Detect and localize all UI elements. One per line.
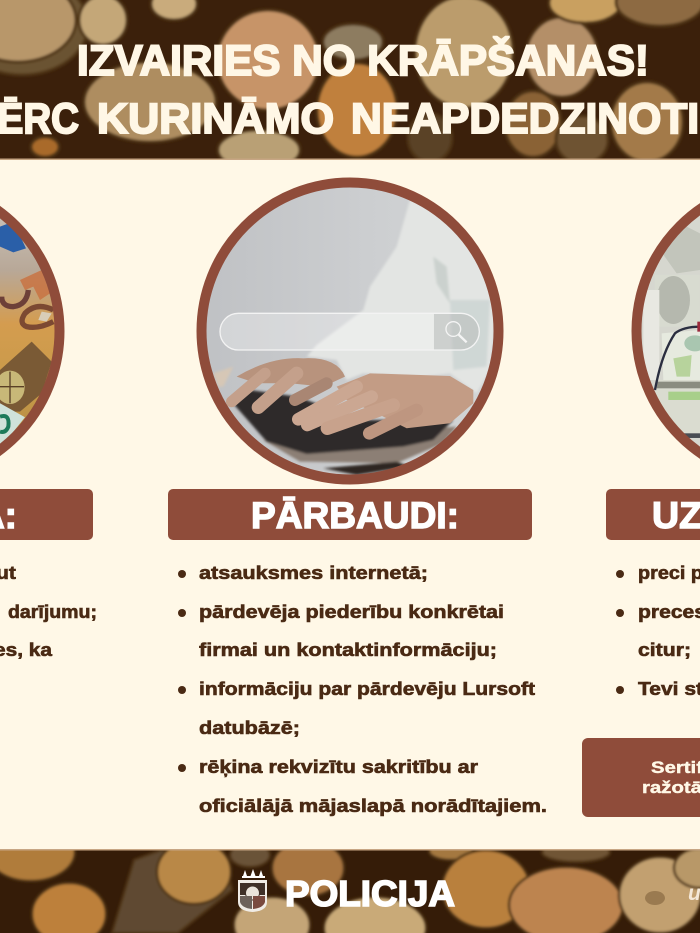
middle column heading — [168, 489, 532, 540]
title — [0, 36, 700, 143]
shirt — [307, 200, 497, 393]
right column list: citur; — [638, 640, 691, 660]
middle column list: oficiālājā mājaslapā norādītajiem. — [199, 796, 547, 816]
logo: police coat of arms — [238, 869, 267, 912]
middle column list: firmai un kontaktinformāciju; — [199, 640, 497, 660]
icon: shield — [238, 880, 267, 912]
icon: three stars — [242, 869, 265, 878]
left column list: darījumu; — [8, 602, 97, 622]
left column list — [0, 563, 97, 660]
icon: EU flag — [0, 222, 26, 252]
right column heading: UZ — [652, 495, 700, 536]
keyboard — [230, 390, 453, 454]
callout: certificate — [582, 738, 700, 817]
right photo: dollar banknotes and glasses — [632, 203, 700, 459]
middle column list: informāciju par pārdevēju Lursoft — [199, 679, 535, 699]
middle photo: typing on a laptop with a search bar — [200, 180, 500, 480]
glasses arm — [655, 327, 700, 390]
right photo ring — [636, 182, 700, 480]
left photo ring — [0, 182, 60, 480]
icon: magnifier — [446, 322, 467, 342]
left column heading — [0, 489, 93, 540]
middle column list: rēķina rekvizītu sakritību ar — [199, 757, 478, 777]
right column heading — [606, 489, 700, 540]
middle photo ring — [202, 182, 498, 480]
middle column list: datubāzē; — [199, 718, 300, 738]
left hand — [237, 358, 345, 387]
middle column list: pārdevēja piederību konkrētai — [199, 602, 504, 622]
left photo: euro banknotes — [0, 206, 64, 456]
title: KURINĀMO — [97, 95, 334, 143]
callout: certificate: Sertif — [651, 758, 700, 777]
footer: stacked wood logs — [0, 849, 700, 933]
right column list: Tevi st — [638, 679, 700, 699]
callout: certificate: ražotā — [642, 778, 700, 797]
right hand — [337, 373, 473, 428]
right column list: preces — [638, 602, 700, 622]
laptop base — [263, 427, 457, 463]
middle column heading: PĀRBAUDI: — [251, 495, 459, 536]
middle column list — [178, 563, 547, 816]
right column list — [616, 563, 700, 699]
middle column list: atsauksmes internetā; — [199, 563, 428, 583]
header: stacked wood logs — [0, 0, 700, 170]
table — [213, 367, 233, 387]
title: IZVAIRIES NO KRĀPŠANAS! — [77, 36, 649, 85]
right column list: preci p — [638, 563, 700, 583]
logo wordmark: POLICIJA — [285, 873, 455, 914]
search bar — [220, 313, 479, 350]
